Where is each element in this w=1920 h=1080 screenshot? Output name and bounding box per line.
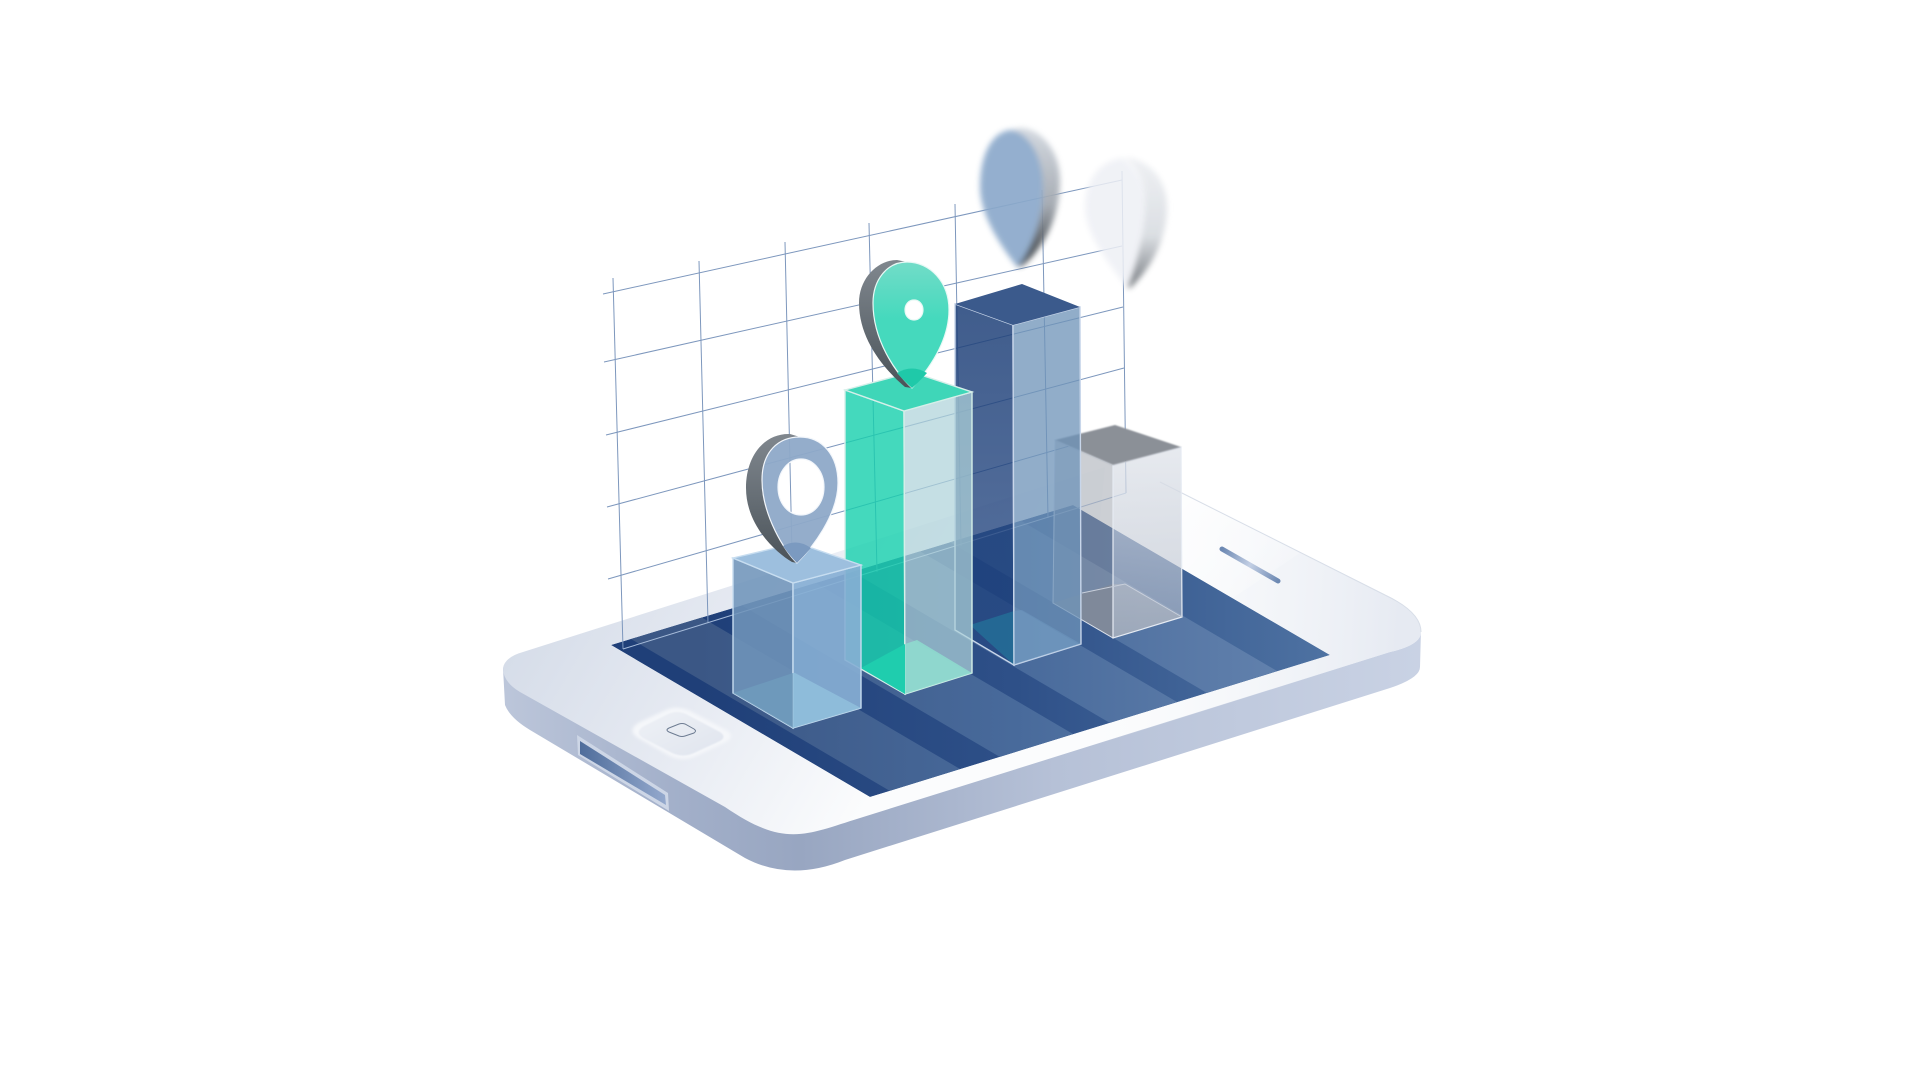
phone top edge hairline [1160,482,1421,632]
bar 4: faded grey [1053,425,1182,638]
map pin: green [859,260,949,388]
home button glyph [667,724,696,736]
phone body side [503,630,1421,871]
map pin: blurred white [1085,157,1167,288]
charging port [577,735,669,811]
speaker slot [1222,549,1278,581]
map pin: blurred blue [980,128,1060,267]
home button [632,708,731,759]
map pin: blue [746,434,838,563]
bar 2: green [845,372,972,694]
phone screen [611,505,1330,797]
phone top face [503,466,1421,834]
bar 3: navy [955,284,1081,665]
screen stripes [631,519,1277,791]
bar 1: light blue [733,543,861,728]
illustration: phone with 3D chart [503,126,1422,870]
transparent grid wall [603,171,1126,649]
